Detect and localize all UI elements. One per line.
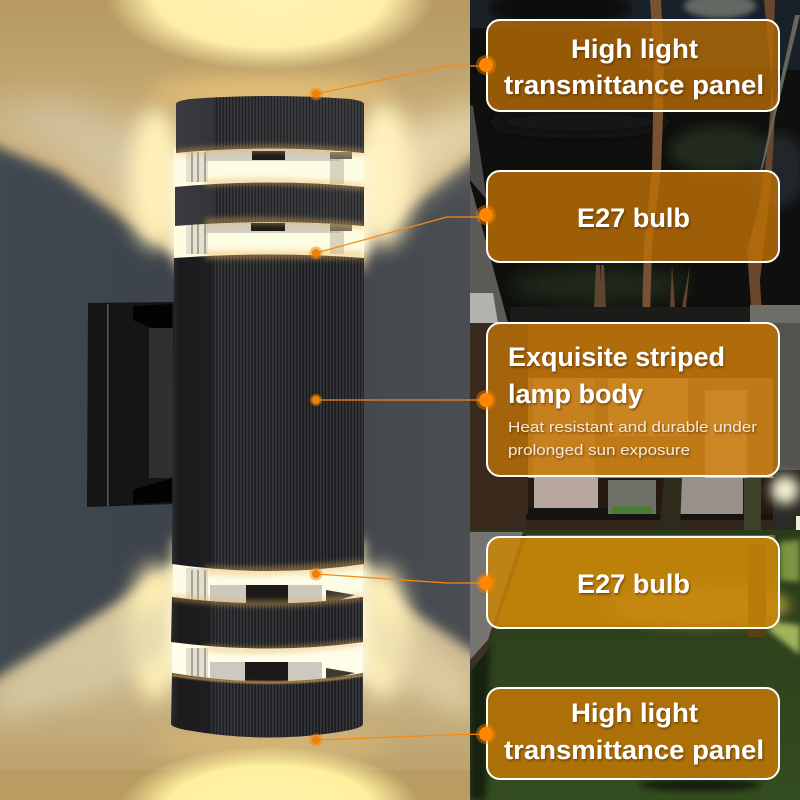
callout panel: high light transmittance panel (bottom): High light bbox=[571, 698, 698, 728]
callout panel: high light transmittance panel (top) bbox=[487, 20, 779, 111]
lamp upper glass band bbox=[174, 220, 364, 260]
leader line 1 bbox=[310, 55, 496, 100]
leader line 3 bbox=[310, 390, 496, 410]
lamp middle ring bbox=[175, 181, 364, 226]
callout panel: exquisite striped lamp body: Heat resistant and durable under bbox=[508, 419, 757, 436]
lawn bbox=[470, 530, 800, 800]
roof eave bbox=[470, 105, 800, 330]
lamp top cap bbox=[176, 96, 364, 153]
lamp bbox=[170, 96, 370, 738]
lamp glow halo bbox=[170, 150, 370, 680]
house wall and interior bbox=[470, 323, 778, 545]
hedge with garden light bbox=[771, 323, 800, 538]
night sky and foliage bbox=[470, 0, 800, 301]
tree trunks bbox=[594, 0, 800, 320]
callout panel: high light transmittance panel (bottom) bbox=[487, 688, 779, 779]
callout panel: E27 bulb (lower): E27 bulb bbox=[577, 569, 690, 599]
photo: night garden and house bbox=[470, 0, 800, 800]
callout panel: E27 bulb (lower) bbox=[487, 537, 779, 628]
callout panel: E27 bulb (upper): E27 bulb bbox=[577, 203, 690, 233]
callout panel: exquisite striped lamp body: lamp body bbox=[508, 379, 643, 409]
leader line 4 bbox=[310, 568, 496, 593]
leader line 5 bbox=[310, 724, 496, 746]
callout panel: E27 bulb (upper) bbox=[487, 171, 779, 262]
wall bracket bbox=[87, 302, 176, 507]
leader line 2 bbox=[310, 205, 496, 260]
lamp lower glass band bbox=[173, 560, 363, 608]
callout panel: high light transmittance panel (bottom): transmittance panel bbox=[504, 735, 764, 765]
patio deck bbox=[470, 532, 527, 672]
callout panel: high light transmittance panel (top): High light bbox=[571, 34, 698, 64]
callout panel: exquisite striped lamp body bbox=[487, 323, 779, 476]
lamp lower ring bbox=[171, 597, 363, 650]
callout panel: exquisite striped lamp body: Exquisite striped bbox=[508, 342, 725, 372]
lamp bottom glass band bbox=[172, 636, 363, 686]
lamp top glass band bbox=[174, 148, 364, 186]
lamp bottom cap bbox=[171, 673, 363, 738]
wall background with light beams bbox=[0, 0, 500, 800]
callout panel: exquisite striped lamp body: prolonged sun exposure bbox=[508, 442, 690, 459]
callout panel: high light transmittance panel (top): transmittance panel bbox=[504, 70, 764, 100]
lamp striped body bbox=[172, 254, 364, 571]
